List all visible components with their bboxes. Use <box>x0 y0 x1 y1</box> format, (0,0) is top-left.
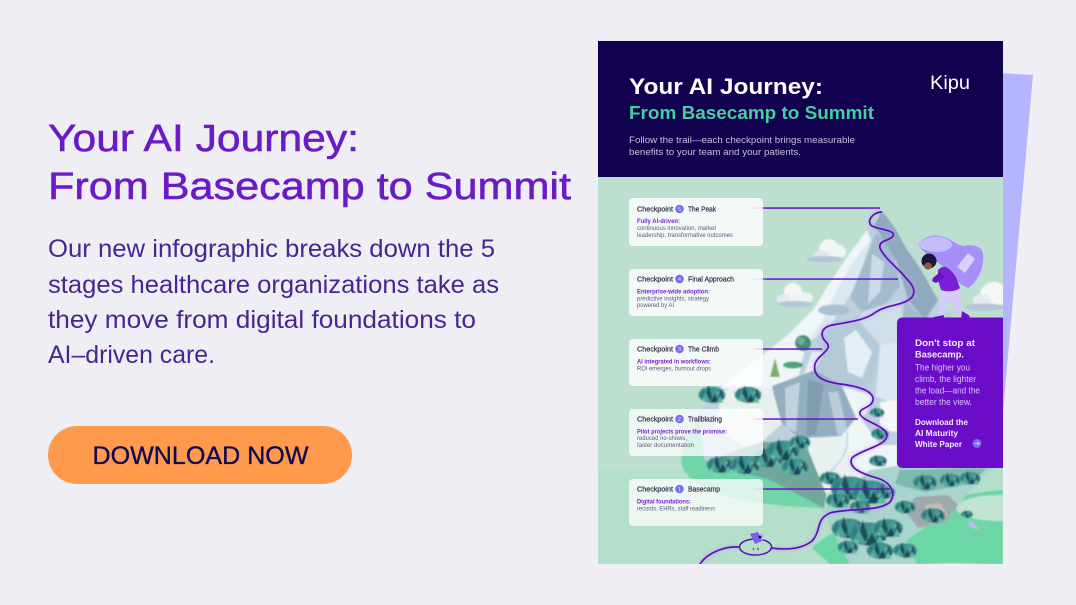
checkpoint 4 card: Final Approach <box>688 276 734 284</box>
checkpoint 5 card: 5 <box>678 207 681 213</box>
checkpoint 5 card: leadership, transformative outcomes <box>637 233 733 239</box>
intro text block: Our new infographic breaks down the 5 <box>48 235 495 263</box>
checkpoint 2 card: Pilot projects prove the promise: <box>637 430 727 436</box>
green ground <box>680 422 1003 564</box>
callout download link <box>915 417 968 449</box>
checkpoint 2 card: Trailblazing <box>688 416 722 424</box>
checkpoint 1 card: Basecamp <box>688 486 720 494</box>
checkpoint 4 card: Enterprise-wide adoption: <box>637 290 710 296</box>
backpack <box>918 235 983 288</box>
infographic poster <box>598 41 1003 564</box>
snowfield <box>838 386 897 482</box>
checkpoint 1 card: Checkpoint <box>637 486 673 494</box>
lower forested slope <box>822 466 1003 564</box>
poster subtitle: From Basecamp to Summit <box>629 102 874 123</box>
callout download link: Download the <box>915 417 968 427</box>
back sheet behind poster <box>1000 73 1033 412</box>
callout text: better the view. <box>915 397 972 408</box>
snow flank <box>720 230 871 392</box>
poster header panel <box>598 41 1003 177</box>
checkpoint 1 card: 1 <box>678 487 681 493</box>
checkpoint 4 card: Checkpoint <box>637 276 673 284</box>
checkpoint 5 card: continuous innovation, market <box>637 226 716 232</box>
head <box>922 254 936 270</box>
checkpoint 4 card: powered by AI <box>637 303 674 309</box>
boots <box>934 311 970 318</box>
checkpoint 5 card: Checkpoint <box>637 206 673 214</box>
poster intro: Follow the trail—each checkpoint brings measurable <box>629 135 855 146</box>
checkpoint 2 card: faster documentation <box>637 443 694 449</box>
checkpoint 3 card <box>629 339 763 386</box>
poster title: Your AI Journey: <box>629 74 823 99</box>
checkpoint 2 card: reduced no-shows, <box>637 436 687 442</box>
trail <box>700 212 914 564</box>
download button: DOWNLOAD NOW <box>92 442 309 470</box>
callout heading: Don't stop at <box>915 338 976 349</box>
connector lines <box>750 207 898 490</box>
checkpoint 5 card: Fully AI-driven: <box>637 219 680 225</box>
callout text <box>915 362 980 408</box>
checkpoint 3 card: AI integrated in workflows: <box>637 360 711 366</box>
download button <box>48 426 352 484</box>
checkpoint 2 card <box>629 409 763 456</box>
arm <box>932 272 945 283</box>
checkpoint 3 card: 3 <box>678 347 681 353</box>
checkpoint 1 card: records, EHRs, staff readiness <box>637 506 715 512</box>
checkpoint 3 card: The Climb <box>688 346 719 354</box>
intro text block <box>48 235 499 369</box>
checkpoint 4 card: 4 <box>678 277 681 283</box>
Kipu logo: Kipu <box>930 73 970 94</box>
blue valley facets <box>772 370 862 440</box>
callout text: The higher you <box>915 362 970 374</box>
checkpoint 3 card: Checkpoint <box>637 346 673 354</box>
icon: arrow circle <box>972 439 982 448</box>
callout download link: AI Maturity <box>915 428 958 438</box>
checkpoint 2 card: 2 <box>678 417 681 423</box>
callout download link: White Paper <box>915 439 963 449</box>
legs <box>938 290 963 316</box>
checkpoint 4 card <box>629 269 763 316</box>
checkpoint 4 card: predictive insights, strategy <box>637 296 709 302</box>
checkpoint 1 card <box>629 479 763 526</box>
rocky outcrop <box>895 468 987 528</box>
clouds <box>777 239 1008 316</box>
checkpoint 2 card: Checkpoint <box>637 416 673 424</box>
poster intro <box>629 135 855 158</box>
intro text block: stages healthcare organizations take as <box>48 271 499 299</box>
mountain body <box>698 211 1003 564</box>
base camp tent <box>750 532 765 550</box>
checkpoint 1 card: Digital foundations: <box>637 500 691 506</box>
hiker with backpack <box>918 235 983 323</box>
forest trees <box>698 335 980 559</box>
callout text: the load—and the <box>915 386 980 396</box>
callout panel: don't stop <box>897 318 1003 468</box>
callout heading: Basecamp. <box>915 350 964 360</box>
poster intro: benefits to your team and your patients. <box>629 147 801 158</box>
checkpoint 5 card: The Peak <box>688 206 716 214</box>
checkpoint 3 card: ROI emerges, burnout drops <box>637 366 711 372</box>
callout text: climb, the lighter <box>915 374 977 385</box>
heading: Your AI Journey: <box>48 118 359 160</box>
heading <box>48 118 572 208</box>
torso <box>938 267 960 291</box>
intro text block: AI–driven care. <box>48 341 215 369</box>
heading: From Basecamp to Summit <box>48 166 572 208</box>
callout heading <box>915 338 976 360</box>
checkpoint 5 card <box>629 198 763 246</box>
intro text block: they move from digital foundations to <box>48 306 476 334</box>
mountain landscape <box>598 177 1003 564</box>
